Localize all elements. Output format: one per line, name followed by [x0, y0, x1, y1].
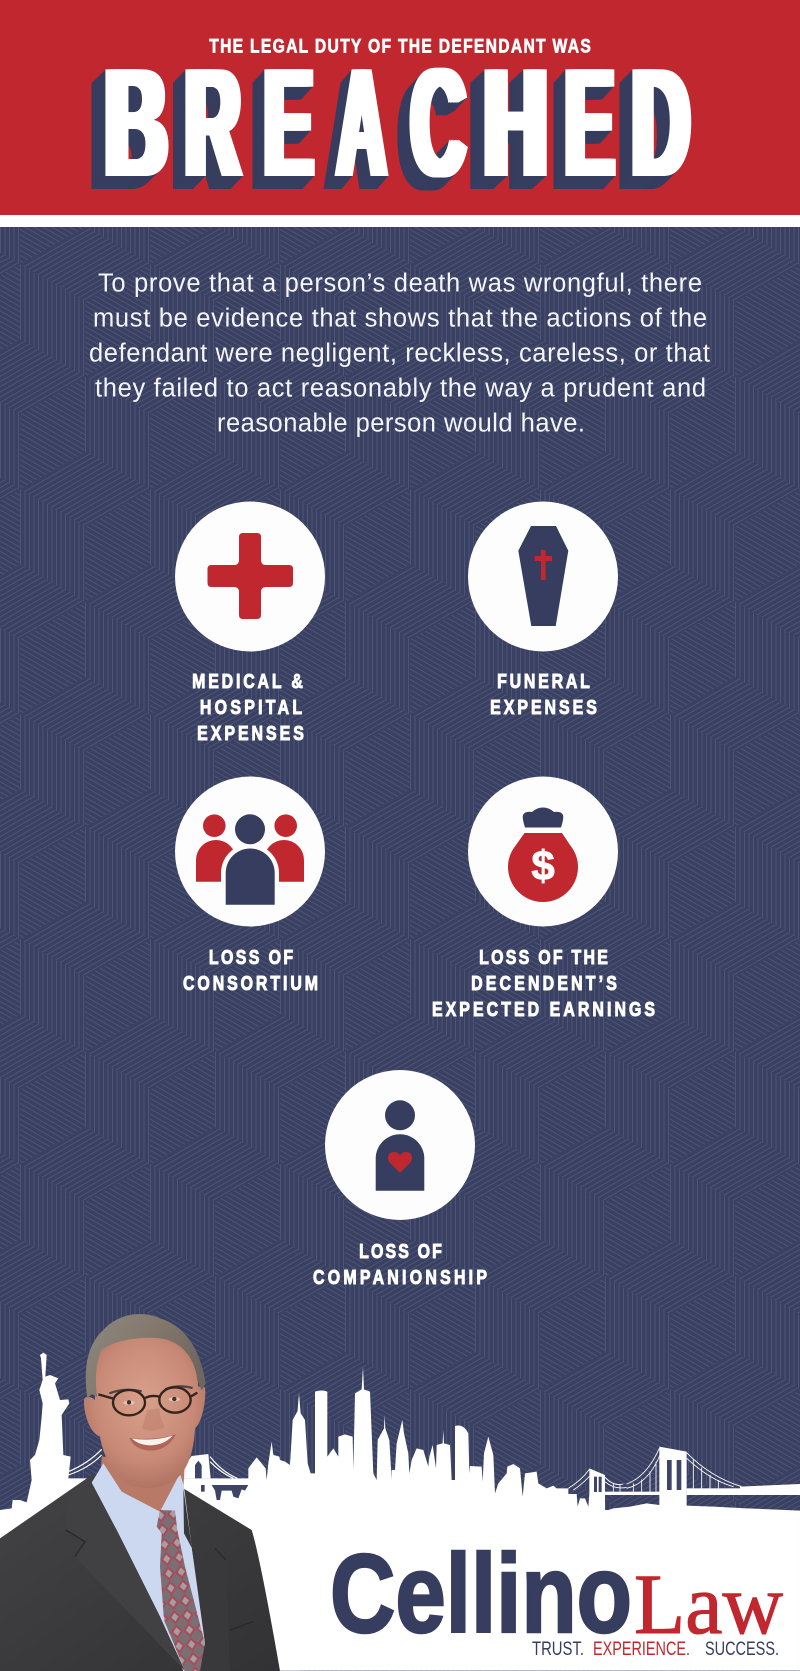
- icon: money bag: [468, 776, 618, 926]
- intro paragraph: defendant were negligent, reckless, careless, or that: [89, 340, 710, 368]
- label: loss of the decendent's expected earnings: LOSS OF THE: [479, 945, 608, 968]
- portrait of attorney: [0, 1314, 280, 1671]
- label: loss of consortium: LOSS OF: [209, 945, 293, 968]
- glasses: [98, 1387, 197, 1415]
- label: medical and hospital expenses: MEDICAL &: [192, 669, 303, 692]
- tagline: TRUST.: [532, 1638, 584, 1660]
- icon: group of people: [175, 776, 325, 926]
- label: medical and hospital expenses: EXPENSES: [197, 721, 304, 744]
- item: loss of companionship: [313, 1070, 487, 1288]
- shirt: [92, 1463, 206, 1671]
- suit lapels: [66, 1475, 185, 1671]
- icon: coffin: [468, 502, 618, 652]
- logo: Cellino Law: [330, 1532, 783, 1660]
- header kicker text: THE LEGAL DUTY OF THE DEFENDANT WAS: [209, 35, 591, 57]
- headline: BREACHED: A: [337, 36, 386, 209]
- headline: BREACHED: H: [484, 36, 547, 209]
- label: loss of consortium: [183, 945, 318, 994]
- headline: BREACHED: D: [632, 36, 690, 209]
- intro paragraph: [89, 270, 710, 438]
- label: medical and hospital expenses: HOSPITAL: [200, 695, 302, 718]
- icon: money bag: $: [531, 842, 555, 889]
- headline: BREACHED: [92, 36, 692, 209]
- header band: [0, 0, 800, 215]
- icon: person with heart: [325, 1070, 475, 1220]
- label: funeral expenses: FUNERAL: [497, 669, 590, 692]
- headline: BREACHED: R: [185, 36, 240, 209]
- label: loss of the decendent's expected earnings: EXPECTED EARNINGS: [432, 997, 655, 1020]
- label: loss of the decendent's expected earnings: [432, 945, 655, 1020]
- hair: [86, 1314, 206, 1398]
- headline: BREACHED: E: [565, 36, 614, 209]
- item: loss of expected earnings: [432, 776, 655, 1020]
- smile: [129, 1434, 176, 1451]
- label: loss of companionship: COMPANIONSHIP: [313, 1265, 487, 1288]
- headline: BREACHED: C: [410, 36, 465, 209]
- label: medical and hospital expenses: [192, 669, 304, 744]
- intro paragraph: must be evidence that shows that the actions of the: [93, 305, 707, 333]
- label: loss of companionship: [313, 1239, 487, 1288]
- tagline: [532, 1638, 779, 1660]
- intro paragraph: they failed to act reasonably the way a prudent and: [95, 375, 706, 403]
- label: loss of the decendent's expected earnings: DECENDENT’S: [471, 971, 617, 994]
- intro paragraph: To prove that a person’s death was wrongful, there: [98, 270, 702, 298]
- suit jacket: [0, 1475, 280, 1671]
- icon: medical cross: [175, 502, 325, 652]
- item: medical and hospital expenses: [175, 502, 325, 744]
- item: loss of consortium: [175, 776, 325, 994]
- eyebrows: [109, 1386, 193, 1393]
- face: [84, 1337, 205, 1488]
- label: funeral expenses: EXPENSES: [490, 695, 597, 718]
- label: loss of consortium: CONSORTIUM: [183, 971, 318, 994]
- nose shading: [142, 1408, 165, 1431]
- New York skyline silhouette: [0, 1353, 800, 1671]
- label: loss of companionship: LOSS OF: [359, 1239, 442, 1262]
- intro paragraph: reasonable person would have.: [217, 410, 585, 438]
- logo word: Law: Law: [634, 1556, 783, 1652]
- tie: [157, 1510, 205, 1671]
- neck: [100, 1457, 185, 1520]
- eyes: [123, 1401, 135, 1405]
- logo word: Cellino: Cellino: [330, 1532, 632, 1656]
- tagline: EXPERIENCE.: [593, 1638, 690, 1660]
- headline: BREACHED: B: [105, 36, 167, 209]
- label: funeral expenses: [490, 669, 597, 718]
- item: funeral expenses: [468, 502, 618, 718]
- headline: BREACHED: E: [264, 36, 313, 209]
